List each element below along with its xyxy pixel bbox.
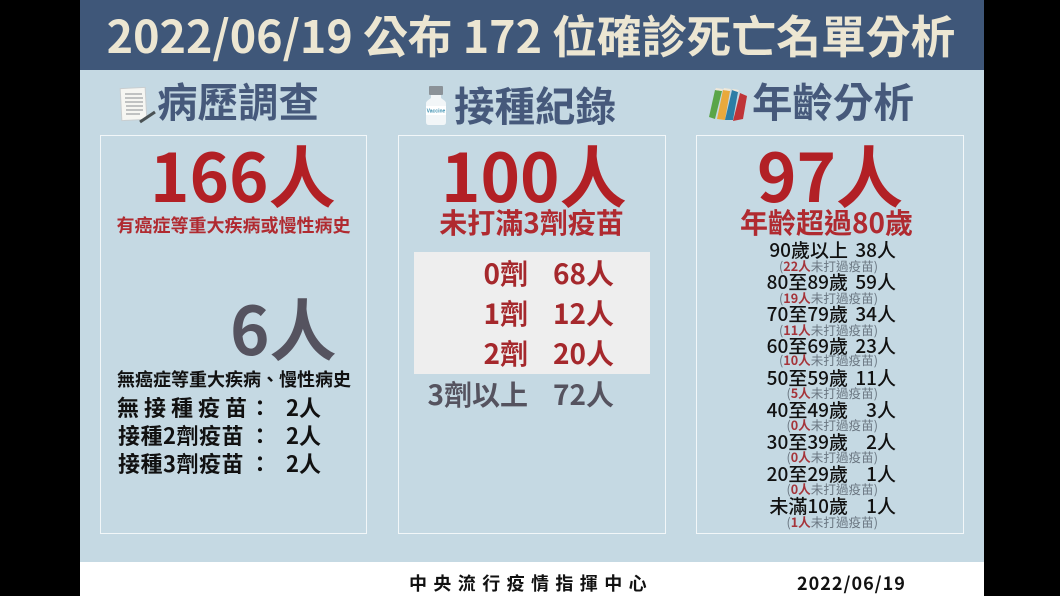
stat: 166 people: 166人 — [150, 125, 336, 222]
heading: age analysis: 年齡分析 — [752, 70, 914, 129]
count: under 10: 1人 — [866, 492, 896, 519]
count: 40-49: 3人 — [866, 396, 896, 423]
breakdown: no vaccine: ： — [249, 391, 271, 423]
stat: 100 people: 100人 — [441, 125, 627, 222]
heading: medical history: 病歷調查 — [157, 70, 319, 129]
unvaccinated: 20-29: (0人未打過疫苗) — [786, 479, 878, 498]
count: 60-69: 23人 — [855, 332, 896, 359]
title banner — [80, 0, 984, 70]
icon: vaccine vial: Vaccine — [427, 108, 446, 114]
panel box: medical history — [100, 135, 367, 534]
breakdown: 3 doses: 2人 — [286, 447, 321, 479]
breakdown: no vaccine: 2人 — [286, 391, 321, 423]
breakdown: no vaccine: 無接種疫苗 — [117, 391, 252, 423]
stat: 97 people: 97人 — [757, 125, 903, 222]
count: 90+: 38人 — [855, 236, 896, 263]
footer bar — [80, 562, 984, 596]
caption: with serious or chronic illness: 有癌症等重大疾病或慢性病史 — [116, 212, 350, 238]
caption: over 80: 年齡超過80歲 — [740, 202, 913, 242]
age row: 20-29: 20至29歲 — [767, 460, 848, 487]
title: 2022/06/19 公布 172 位確診死亡名單分析 — [107, 1, 955, 66]
age row: 30-39: 30至39歲 — [767, 428, 848, 455]
unvaccinated: 80-89: (19人未打過疫苗) — [779, 288, 878, 307]
value: 0 doses: 68人 — [553, 253, 614, 293]
count: 30-39: 2人 — [866, 428, 896, 455]
breakdown: 2 doses: 2人 — [286, 419, 321, 451]
footer: agency name: 中央流行疫情指揮中心 — [409, 570, 653, 596]
unvaccinated: under 10: (1人未打過疫苗) — [786, 512, 878, 531]
age row: under 10: 未滿10歲 — [769, 492, 848, 519]
row: 3 or more doses: 3劑以上 — [427, 374, 528, 414]
unvaccinated: 40-49: (0人未打過疫苗) — [786, 415, 878, 434]
caption: without illness: 無癌症等重大疾病、慢性病史 — [117, 366, 351, 392]
value: 3 or more doses: 72人 — [553, 374, 614, 414]
caption: fewer than 3 doses: 未打滿3劑疫苗 — [439, 202, 624, 242]
icon: vaccine vial — [426, 86, 446, 125]
row: 2 doses: 2劑 — [483, 333, 528, 373]
age row: 80-89: 80至89歲 — [767, 268, 848, 295]
unvaccinated: 30-39: (0人未打過疫苗) — [786, 447, 878, 466]
breakdown: no vaccine — [117, 391, 321, 423]
age row: 50-59: 50至59歲 — [767, 364, 848, 391]
unvaccinated: 90+: (22人未打過疫苗) — [779, 256, 878, 275]
breakdown: 3 doses — [118, 447, 321, 479]
breakdown: 2 doses — [118, 419, 321, 451]
count: 80-89: 59人 — [855, 268, 896, 295]
value: 1 dose: 12人 — [553, 293, 614, 333]
age row: 70-79: 70至79歲 — [767, 300, 848, 327]
value: 2 doses: 20人 — [553, 333, 614, 373]
age row: 60-69: 60至69歲 — [767, 332, 848, 359]
unvaccinated: 70-79: (11人未打過疫苗) — [779, 320, 878, 339]
panel box: age — [696, 135, 964, 534]
stat: 6 people: 6人 — [230, 278, 337, 375]
age row: 90+: 90歲以上 — [769, 236, 848, 263]
breakdown: 3 doses: ： — [249, 447, 271, 479]
row: 0 doses: 0劑 — [483, 253, 528, 293]
icon: document and pen — [120, 87, 156, 124]
panel box: vaccination — [398, 135, 666, 534]
breakdown: 2 doses: ： — [249, 419, 271, 451]
footer: date: 2022/06/19 — [797, 570, 906, 596]
heading: vaccination record: 接種紀錄 — [454, 74, 616, 133]
highlight box — [414, 252, 650, 374]
count: 20-29: 1人 — [866, 460, 896, 487]
count: 70-79: 34人 — [855, 300, 896, 327]
unvaccinated: 50-59: (5人未打過疫苗) — [786, 383, 878, 402]
icon: books — [709, 88, 747, 121]
breakdown: 3 doses: 接種3劑疫苗 — [118, 447, 244, 479]
breakdown: 2 doses: 接種2劑疫苗 — [118, 419, 244, 451]
count: 50-59: 11人 — [855, 364, 896, 391]
row: 1 dose: 1劑 — [483, 293, 528, 333]
age row: 40-49: 40至49歲 — [767, 396, 848, 423]
unvaccinated: 60-69: (10人未打過疫苗) — [779, 350, 878, 369]
